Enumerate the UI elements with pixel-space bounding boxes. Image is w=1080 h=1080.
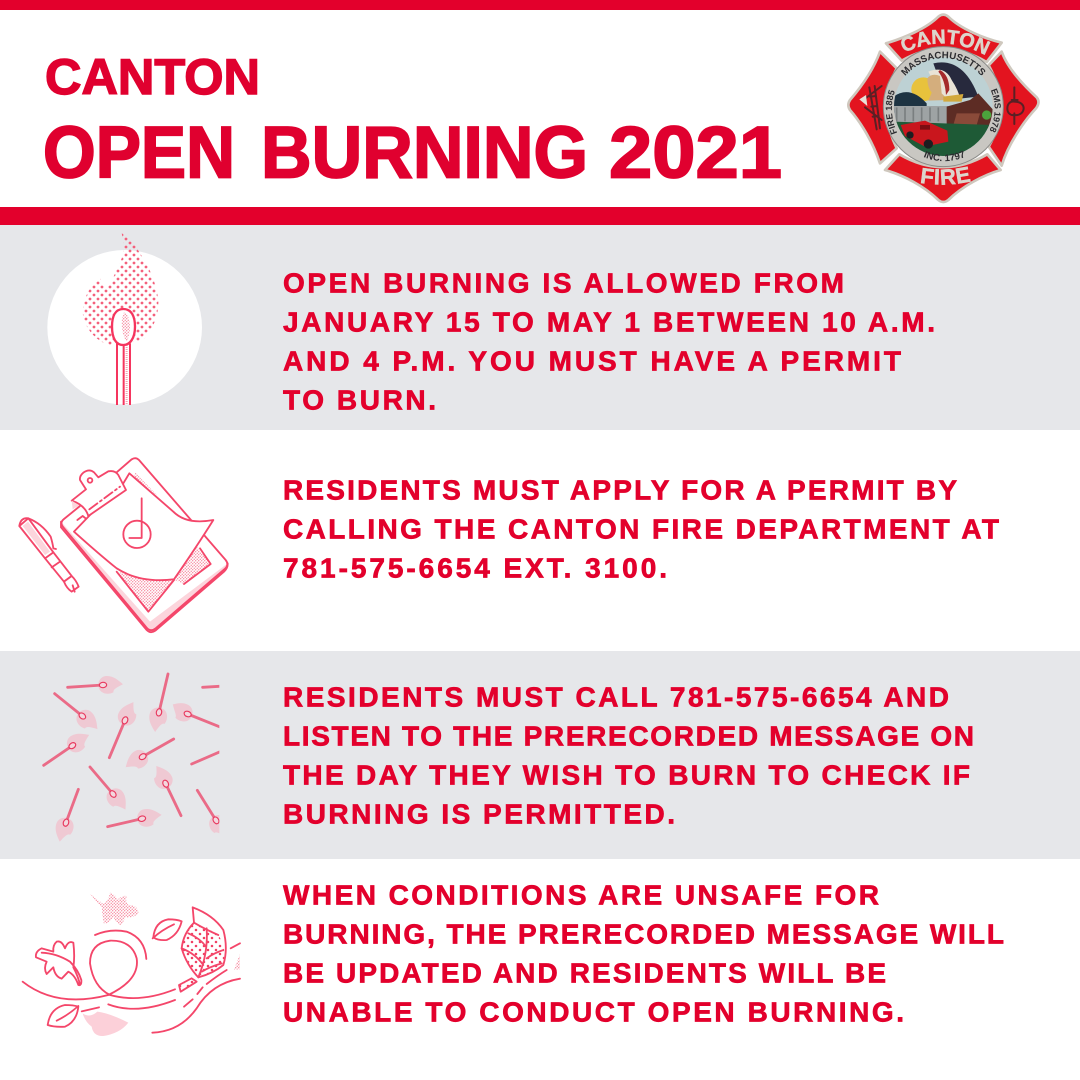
text block: row 3: THE DAY THEY WISH TO BURN TO CHECK IF <box>283 760 970 791</box>
title: BURNING <box>261 112 588 194</box>
clipboard <box>61 458 228 632</box>
text block: row 1 <box>283 268 935 416</box>
clipped right leaf fragment <box>234 954 240 969</box>
icon: Canton Fire Department badge <box>847 13 1040 204</box>
title <box>43 49 782 194</box>
icon: Canton Fire Department badge: EMS 1978 <box>990 88 1001 132</box>
icon: Canton Fire Department badge: MASSACHUSETTS <box>900 52 986 76</box>
text block: row 4: BURNING, THE PRERECORDED MESSAGE WILL <box>283 919 1004 950</box>
dotted top leaf <box>90 893 138 925</box>
paper sheet <box>74 473 213 580</box>
icon: Canton Fire Department badge: INC. 1797 <box>924 150 964 162</box>
text block: row 3: BURNING IS PERMITTED. <box>283 799 675 830</box>
outlined oak leaf <box>36 941 81 985</box>
wind lines <box>23 931 240 1033</box>
text block: row 1: OPEN BURNING IS ALLOWED FROM <box>283 268 844 299</box>
text block: row 4 <box>283 880 1004 1028</box>
icon: clipboard and pen <box>19 458 228 632</box>
text block: row 4: UNABLE TO CONDUCT OPEN BURNING. <box>283 997 904 1028</box>
icon: lit match in white circle <box>47 230 202 405</box>
filled pale leaf <box>83 1012 128 1036</box>
text block: row 4: WHEN CONDITIONS ARE UNSAFE FOR <box>283 880 879 911</box>
title: 2021 <box>609 112 782 194</box>
panel: row 1 background <box>0 225 1080 430</box>
text block: row 1: TO BURN. <box>283 385 436 416</box>
white circle <box>47 250 202 405</box>
small leaf lower <box>48 1005 78 1027</box>
text block: row 2: RESIDENTS MUST APPLY FOR A PERMIT BY <box>283 475 957 506</box>
clip <box>72 470 126 516</box>
icon: Canton Fire Department badge: FIRE 1885 <box>886 90 897 135</box>
title: OPEN <box>43 112 235 194</box>
hatched back sheet <box>133 472 157 495</box>
text block: row 3 <box>283 682 974 830</box>
header red rule <box>0 207 1080 225</box>
flame <box>83 230 158 346</box>
icon: Canton Fire Department badge: FIRE <box>920 166 971 185</box>
large dotted leaf <box>182 925 224 977</box>
small leaf upper <box>153 919 182 940</box>
icon: wind and leaves <box>23 893 240 1036</box>
text block: row 1: AND 4 P.M. YOU MUST HAVE A PERMIT <box>283 346 901 377</box>
icon: scattered matches <box>44 674 234 845</box>
text block: row 4: BE UPDATED AND RESIDENTS WILL BE <box>283 958 886 989</box>
text block: row 1: JANUARY 15 TO MAY 1 BETWEEN 10 A.M. <box>283 307 935 338</box>
panel: row 3 background <box>0 651 1080 859</box>
text block: row 2: CALLING THE CANTON FIRE DEPARTMENT AT <box>283 514 999 545</box>
pen <box>19 518 79 592</box>
title: CANTON <box>45 49 260 105</box>
top red bar <box>0 0 1080 10</box>
icon: Canton Fire Department badge: CANTON <box>901 29 990 55</box>
text block: row 3: RESIDENTS MUST CALL 781-575-6654 AND <box>283 682 949 713</box>
match head <box>112 309 135 345</box>
text block: row 2: 781-575-6654 EXT. 3100. <box>283 553 667 584</box>
text block: row 2 <box>283 475 999 584</box>
match stick <box>117 343 130 405</box>
text block: row 3: LISTEN TO THE PRERECORDED MESSAGE ON <box>283 721 974 752</box>
clock mark <box>123 498 151 548</box>
